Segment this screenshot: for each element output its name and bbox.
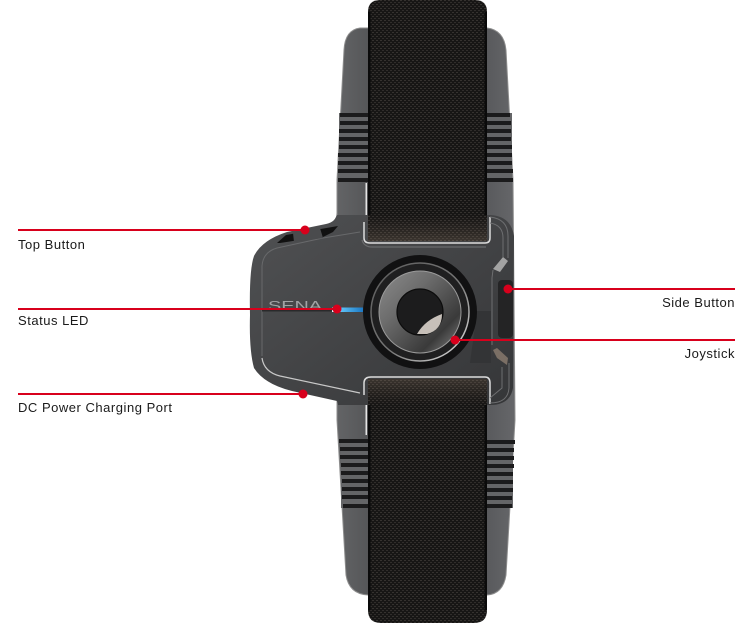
back plate (337, 28, 515, 595)
LED (332, 308, 363, 312)
highlight slivers beside straps (366, 183, 367, 435)
inner face outline (262, 232, 360, 356)
callout: Status LED: Status LED (18, 313, 89, 328)
grip ridges: upper right (487, 113, 513, 182)
SENA logo: SENA (268, 298, 322, 313)
joystick (363, 255, 477, 369)
upper strap frame (364, 217, 490, 243)
callout: Side Button: Side Button (662, 295, 735, 310)
callout: Joystick (450, 336, 735, 361)
grip ridges: upper left (338, 113, 368, 182)
upper strap window (368, 215, 487, 241)
top button recess (277, 226, 338, 243)
callout: DC Power Charging Port: DC Power Charging Port (18, 400, 172, 415)
callout: Top Button: Top Button (18, 237, 85, 252)
lower strap frame (364, 377, 490, 404)
strap: lower (368, 380, 487, 623)
side button (498, 280, 513, 338)
callout: Joystick: Joystick (685, 346, 735, 361)
callout: DC Power Charging Port (18, 390, 308, 415)
seam right (470, 311, 491, 363)
grip ridges: lower right (487, 440, 515, 508)
strap: upper (368, 0, 487, 240)
main head unit (250, 200, 514, 405)
callout: Top Button (18, 226, 310, 252)
lower strap window (368, 379, 487, 405)
callout: Side Button (504, 284, 735, 310)
side chevron upper (493, 257, 508, 272)
callout: Status LED (18, 304, 342, 328)
seam (262, 310, 365, 312)
right grooves (490, 217, 509, 403)
grip ridges: lower left (339, 439, 368, 508)
side chevron lower (493, 348, 508, 365)
